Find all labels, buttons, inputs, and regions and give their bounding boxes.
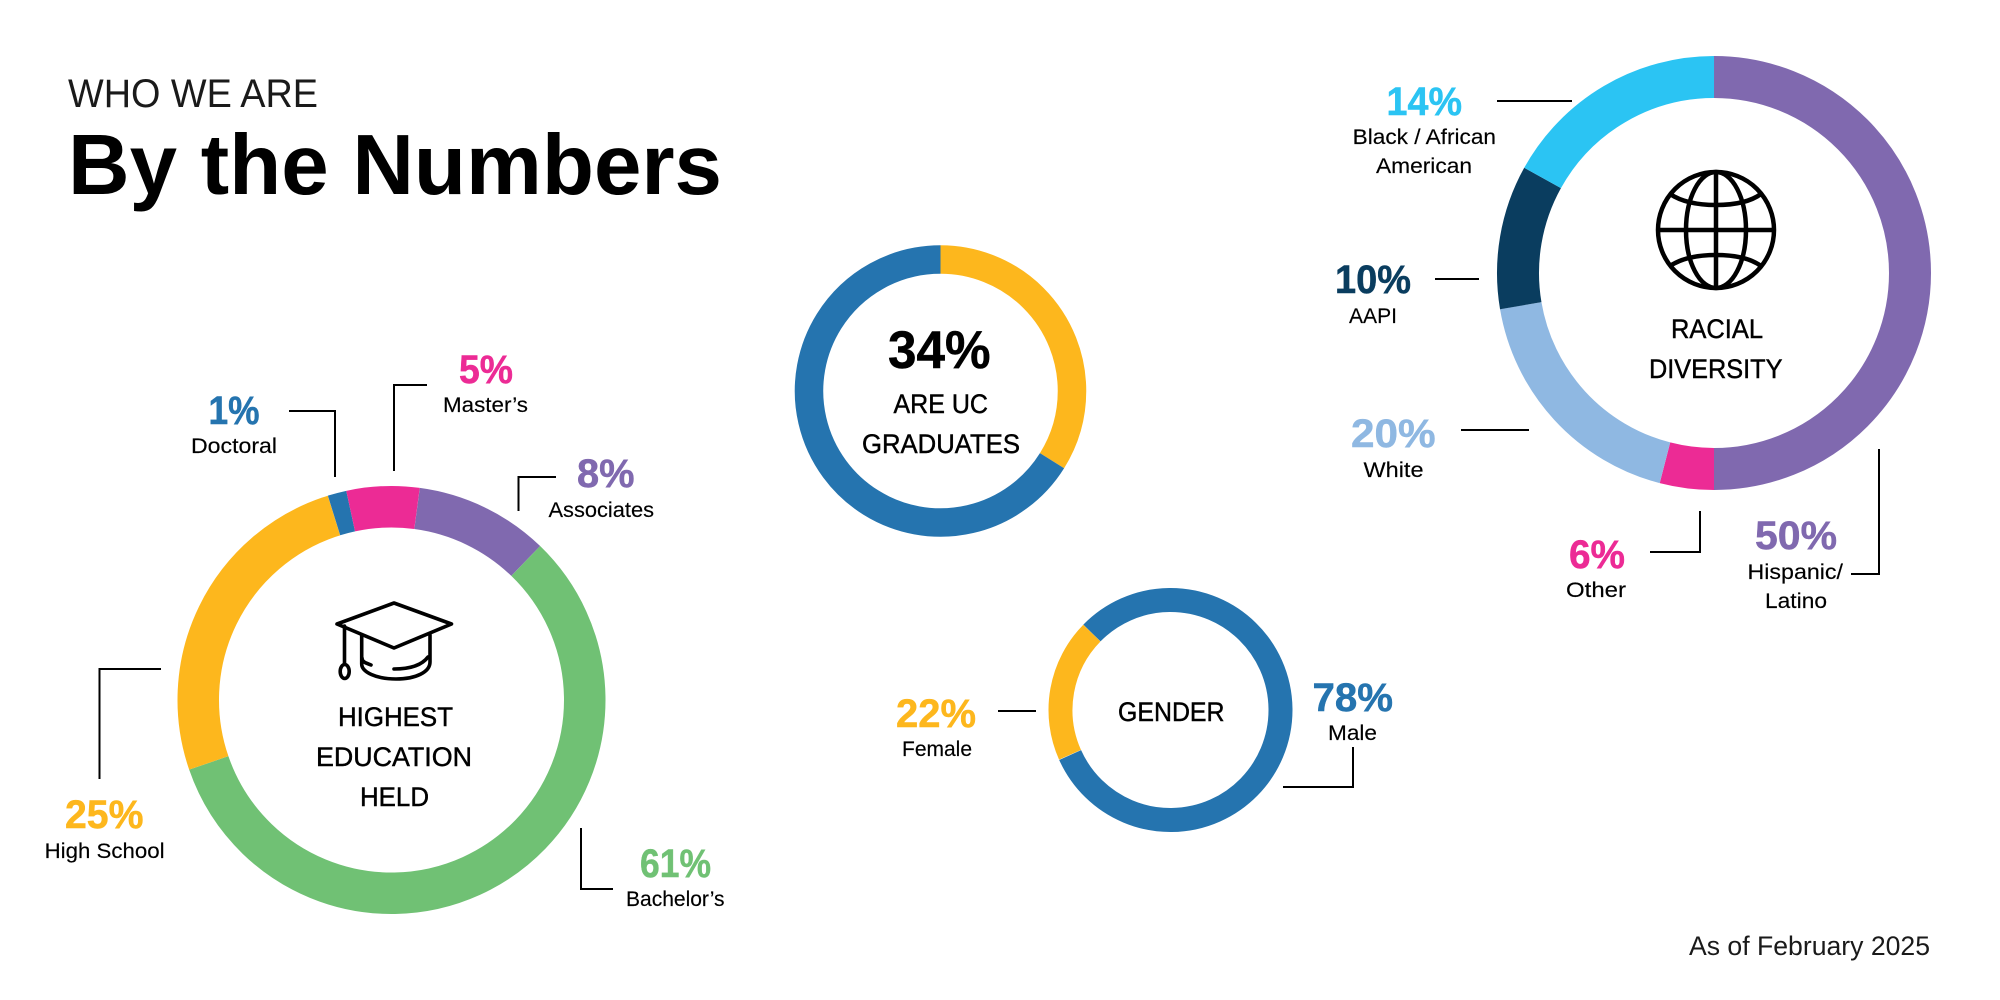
callout: Other: Other <box>1566 579 1626 602</box>
callout: associates: Associates <box>548 499 654 522</box>
eyebrow heading: WHO WE ARE <box>68 72 318 116</box>
callout: Hispanic / Latino: 50% <box>1755 514 1837 558</box>
callout: Black / African American: Black / African <box>1353 126 1496 149</box>
icon: globe <box>1658 172 1774 288</box>
callout: White: White <box>1364 459 1424 482</box>
callout: Other: 6% <box>1569 533 1625 577</box>
callout: high school <box>45 669 165 863</box>
callout: doctoral: 1% <box>208 389 260 433</box>
callout: Other <box>1566 511 1700 602</box>
icon: graduation cap <box>337 603 452 679</box>
callout: bachelor's: Bachelor’s <box>626 888 724 911</box>
chart title: GENDER <box>1118 697 1224 727</box>
callout: master's: Master’s <box>443 394 528 417</box>
callout: master's: 5% <box>459 348 513 392</box>
chart title <box>316 702 472 812</box>
stat label: ARE UC <box>894 389 988 419</box>
callout: AAPI <box>1335 258 1479 328</box>
callout: Hispanic / Latino: Latino <box>1765 590 1827 613</box>
donut chart: education <box>118 427 665 973</box>
callout: associates: 8% <box>577 452 634 496</box>
callout: bachelor's: 61% <box>640 842 711 886</box>
callout: AAPI: 10% <box>1335 258 1411 302</box>
donut chart: gender <box>1015 554 1326 866</box>
chart title: DIVERSITY <box>1649 354 1782 384</box>
callout: White <box>1351 412 1529 482</box>
title block <box>68 72 722 213</box>
callout: doctoral <box>191 389 335 477</box>
date note: As of February 2025 <box>1689 931 1930 961</box>
panel: racial diversity <box>1335 7 1980 613</box>
donut chart: UC graduates <box>759 210 1122 572</box>
callout: male: 78% <box>1312 676 1393 720</box>
chart title <box>1649 314 1782 384</box>
callout: White: 20% <box>1351 412 1436 456</box>
callout: bachelor's <box>581 828 724 911</box>
stat: 34%: 34% <box>888 321 990 380</box>
callout: female: Female <box>902 738 972 761</box>
callout: Black / African American <box>1353 80 1572 178</box>
callout: Black / African American: 14% <box>1386 80 1462 124</box>
stat label: GRADUATES <box>862 429 1020 459</box>
callout: AAPI: AAPI <box>1349 305 1397 328</box>
panel: UC graduates <box>759 210 1122 572</box>
chart title: EDUCATION <box>316 742 472 772</box>
chart title: RACIAL <box>1671 314 1763 344</box>
panel: gender <box>896 554 1393 866</box>
main heading: By the Numbers <box>68 118 722 213</box>
callout: female: 22% <box>896 692 976 736</box>
chart title: HELD <box>360 782 429 812</box>
callout: Hispanic / Latino <box>1748 449 1879 613</box>
callout: male <box>1283 676 1393 787</box>
callout: male: Male <box>1328 722 1377 745</box>
callout: high school: 25% <box>65 793 144 837</box>
donut chart: racial diversity <box>1448 7 1980 539</box>
callout: Black / African American: American <box>1376 155 1472 178</box>
callout: high school: High School <box>45 840 165 863</box>
callout: female <box>896 692 1036 761</box>
chart title: HIGHEST <box>338 702 453 732</box>
callout: doctoral: Doctoral <box>191 435 277 458</box>
stat label <box>862 389 1020 459</box>
panel: highest education held <box>45 348 725 973</box>
callout: master's <box>394 348 528 471</box>
callout: Hispanic / Latino: Hispanic/ <box>1748 561 1843 584</box>
callout: associates <box>518 452 654 522</box>
